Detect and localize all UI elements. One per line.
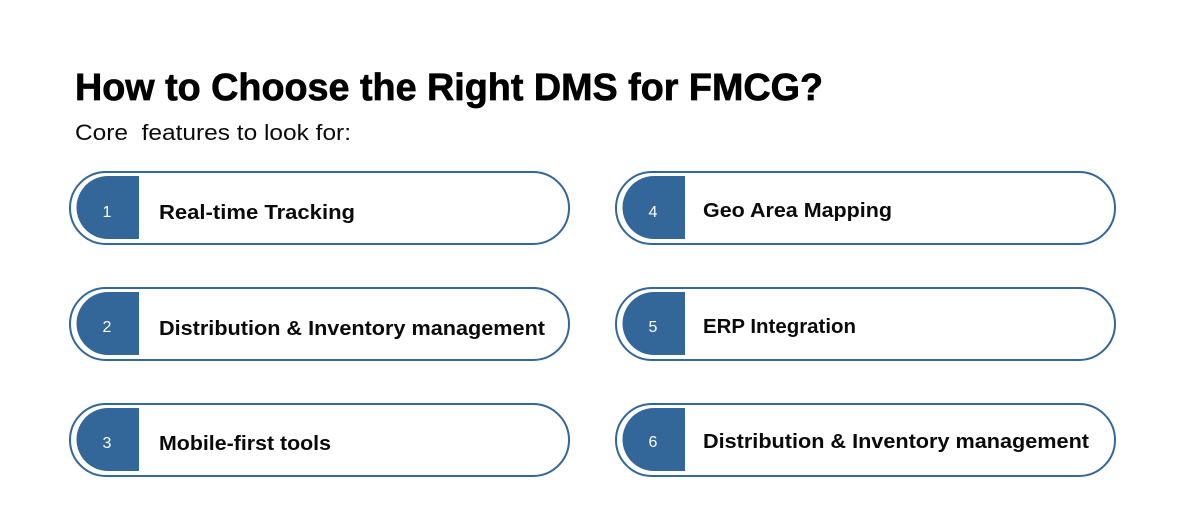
subtitle: Core features to look for: xyxy=(75,120,351,145)
feature 3: Mobile-first tools xyxy=(159,433,331,455)
feature 6: 6 xyxy=(649,434,658,451)
feature 5 xyxy=(616,288,1115,360)
feature 3 xyxy=(70,404,569,476)
feature 2 xyxy=(70,288,569,360)
feature 4: 4 xyxy=(649,204,658,221)
feature 1: 1 xyxy=(103,204,112,221)
feature 5: 5 xyxy=(649,319,658,336)
feature 5: ERP Integration xyxy=(703,316,856,338)
feature 3: 3 xyxy=(103,435,112,452)
feature 4: Geo Area Mapping xyxy=(703,200,892,222)
feature 2: 2 xyxy=(103,319,112,336)
feature 1: Real-time Tracking xyxy=(159,202,355,224)
feature 2: Distribution & Inventory management xyxy=(159,318,545,340)
title: How to Choose the Right DMS for FMCG? xyxy=(75,67,823,109)
feature 6 xyxy=(616,404,1115,476)
feature 4 xyxy=(616,172,1115,244)
feature 6: Distribution & Inventory management xyxy=(703,431,1089,453)
feature 1 xyxy=(70,172,569,244)
